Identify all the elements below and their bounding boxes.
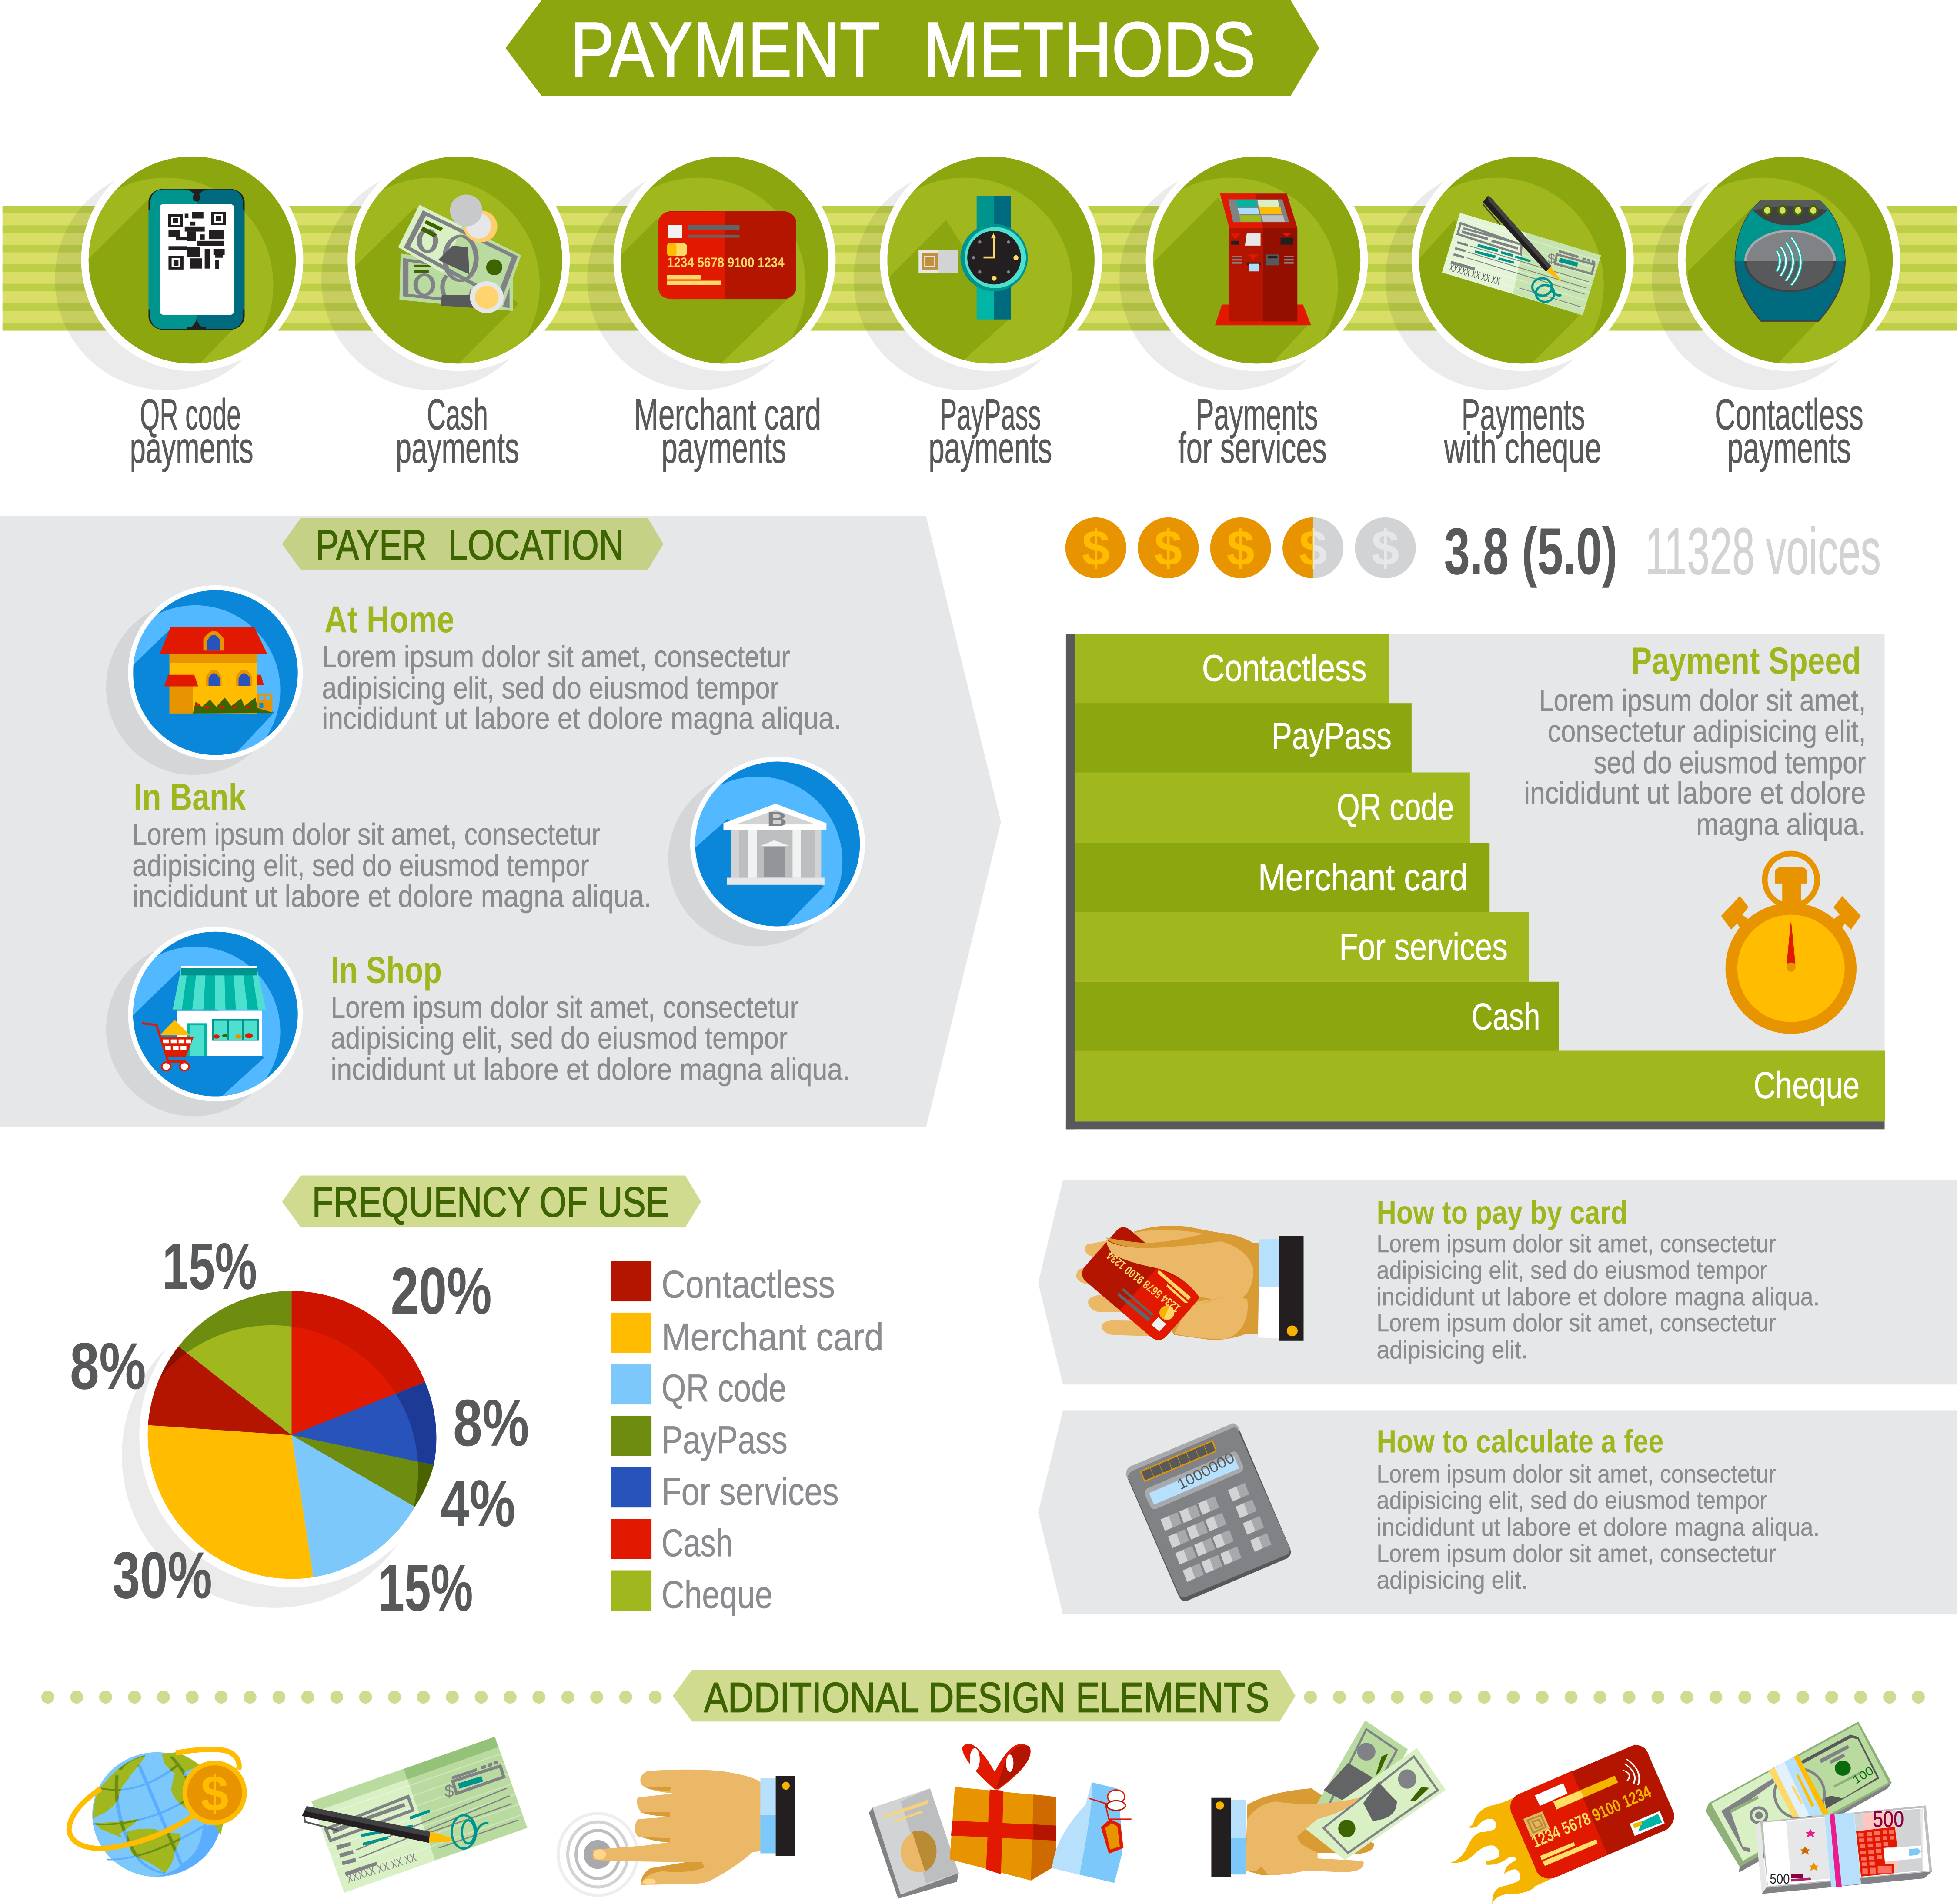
legend: For services [661,1470,839,1513]
stair bar chart [1075,634,1885,1121]
text block: in shop: incididunt ut labore et dolore magna aliqua. [331,1052,850,1086]
icon: stopwatch [1721,854,1861,1034]
panel: payer location [0,516,1001,1127]
text block: at home: At Home [324,599,454,640]
label: payments for services: Payments [1196,390,1318,439]
label: PayPass payments: PayPass [940,390,1041,439]
text block: in bank [132,777,651,914]
rating value: 3.8 (5.0) [1444,514,1617,588]
icon: payment kiosk [1215,193,1311,325]
icon: banknote bundles [1705,1721,1932,1894]
icon: globe with coin: $ [201,1766,229,1821]
percent labels: 15% [162,1230,257,1304]
text block: how to pay by card: adipisicing elit. [1376,1336,1528,1364]
dotted divider right [1304,1691,1925,1704]
label: PayPass payments [928,390,1052,473]
label: payments with cheque: with cheque [1444,424,1601,473]
label: merchant card payments: Merchant card [634,390,821,439]
icon: smart watch [960,196,1028,320]
percent labels [70,1230,529,1625]
payment method: services [1119,149,1368,473]
stair bar chart: Contactless [1202,647,1367,689]
striped ribbon behind payment circles [3,206,1957,331]
icon: cheque with pen: XXXXX XX XX XX [345,1851,418,1885]
percent labels: 8% [70,1329,146,1403]
percent labels: 8% [453,1386,529,1460]
icon: phone with QR code [149,189,244,330]
text block: payment speed: Payment Speed [1631,640,1861,682]
icon: globe with coin [69,1749,247,1877]
icon: banknotes and coins [398,194,521,313]
icon: banknote bundles: 100 [1850,1764,1876,1787]
icon: flaming credit card: 1234 5678 9100 1234 [1529,1782,1654,1852]
legend: QR code [661,1366,786,1410]
panel: payment speed [1066,634,1885,1129]
stair bar chart: QR code [1337,787,1454,828]
text block: in bank: In Bank [134,777,246,818]
icon: SIM chip [918,250,958,273]
label: cash payments [396,390,519,473]
label: payments for services [1178,390,1327,473]
stair bar chart: Cash [1472,996,1540,1038]
payment method: QR code [55,149,303,473]
text block: how to pay by card [1376,1194,1820,1364]
stair bar chart: Merchant card [1258,857,1468,899]
label: contactless payments: payments [1727,424,1851,473]
icon: red credit card: 1234 5678 9100 1234 [667,254,785,270]
text block: how to calculate a fee [1376,1423,1820,1594]
rating: five coins: $ [1082,520,1110,576]
text block: at home: Lorem ipsum dolor sit amet, consectetur [322,640,790,674]
title banner: PAYMENT [571,6,880,93]
icon: hand holding banknotes [1211,1721,1446,1877]
label: merchant card payments [634,390,821,473]
label: cash payments: Cash [427,390,488,439]
label: QR code payments: payments [130,424,254,473]
text block: how to calculate a fee: adipisicing elit. [1376,1566,1528,1594]
pie chart: frequency of use [70,1230,529,1625]
percent labels: 20% [391,1254,492,1328]
payment method: contactless [1652,149,1900,473]
heading: payer location [282,518,663,570]
text block: in shop: In Shop [331,949,442,991]
text block: how to pay by card: Lorem ipsum dolor sit amet, consectetur [1376,1230,1776,1258]
text block: how to pay by card: How to pay by card [1376,1194,1627,1230]
title banner: METHODS [924,6,1256,93]
rating: five coins: $ [1227,520,1255,576]
label: merchant card payments: payments [661,424,786,473]
payment method: merchant card [587,149,835,473]
text block: in shop: adipisicing elit, sed do eiusmod tempor [331,1021,788,1055]
icon: calculator: 1000000 [1174,1449,1237,1493]
percent labels: 4% [441,1467,515,1541]
dotted divider left [41,1691,662,1704]
label: contactless payments [1715,390,1863,473]
legend [611,1261,884,1616]
text block: payment speed: sed do eiusmod tempor [1594,745,1866,780]
text block: how to calculate a fee: incididunt ut labore et dolore magna aliqua. [1376,1514,1820,1541]
rating: five coins: $ [1154,520,1182,576]
text block: payment speed: magna aliqua. [1696,807,1866,841]
legend: Cash [661,1521,733,1564]
icon: banknote bundles: 500 [1770,1871,1790,1887]
label: payments with cheque [1444,390,1601,473]
text block: in bank: Lorem ipsum dolor sit amet, consectetur [132,817,600,851]
icon: finger pressing button [558,1770,795,1895]
rating: five coins [1065,517,1416,578]
text block: how to calculate a fee: Lorem ipsum dolor sit amet, consectetur [1376,1461,1776,1488]
text block: in shop [331,949,850,1086]
legend: Merchant card [661,1315,884,1358]
circle icon: in bank: B [767,808,787,830]
circle icon: at home [106,585,303,775]
legend: Cheque [661,1573,772,1616]
stair bar chart: For services [1339,926,1508,968]
icon: cheque and pen [1442,196,1601,315]
icon: calculator [1126,1424,1291,1601]
text block: payment speed [1524,640,1866,841]
text block: how to calculate a fee: How to calculate a fee [1376,1423,1664,1460]
label: cash payments: payments [396,424,519,473]
text block: payment speed: consectetur adipisicing elit, [1548,714,1866,748]
payment method: cash [321,149,570,473]
rating: five coins: $ [1372,520,1399,576]
percent labels: 15% [378,1551,473,1625]
icon: contactless terminal [1735,200,1845,321]
text block: payment speed: incididunt ut labore et dolore [1524,776,1866,810]
payment method: cheque [1386,149,1634,473]
text block: at home: adipisicing elit, sed do eiusmod tempor [322,670,779,705]
legend: Contactless [661,1263,835,1306]
icon: hand holding card [1076,1226,1304,1341]
label: QR code payments [130,390,254,473]
payment method: PayPass [854,149,1102,473]
text block: at home [322,599,841,735]
payment method: cheque: XXXXX XX XX XX [1448,262,1501,287]
payment method: cheque: $ [1548,251,1556,267]
panel: how to pay by card [1038,1180,1957,1384]
text block: in shop: Lorem ipsum dolor sit amet, consectetur [331,990,799,1024]
icon: banknote bundles: 500 [1873,1807,1904,1832]
label: QR code payments: QR code [140,390,241,439]
panel: how to calculate a fee [1038,1410,1957,1614]
text block: how to calculate a fee: Lorem ipsum dolor sit amet, consectetur [1376,1540,1776,1567]
text block: in bank: adipisicing elit, sed do eiusmod tempor [132,848,589,883]
legend: PayPass [661,1418,788,1461]
label: payments for services: for services [1178,424,1327,473]
circle icon: in shop [106,927,303,1116]
text block: payment speed: Lorem ipsum dolor sit amet, [1539,683,1866,717]
rating: five coins: $ [1299,520,1327,576]
stair bar chart: PayPass [1272,715,1392,757]
heading: payer location: LOCATION [448,521,624,569]
title banner [505,0,1319,96]
text block: in bank: incididunt ut labore et dolore magna aliqua. [132,879,651,914]
heading: frequency of use: FREQUENCY OF USE [312,1178,669,1226]
text block: at home: incididunt ut labore et dolore magna aliqua. [322,701,841,735]
icon: cheque with pen: $ [444,1781,454,1801]
text block: how to pay by card: Lorem ipsum dolor sit amet, consectetur [1376,1309,1776,1337]
percent labels: 30% [112,1538,212,1612]
text block: how to pay by card: incididunt ut labore et dolore magna aliqua. [1376,1283,1820,1311]
label: contactless payments: Contactless [1715,390,1863,439]
icon: cheque with pen [302,1737,528,1893]
text block: how to pay by card: adipisicing elit, sed do eiusmod tempor [1376,1257,1767,1284]
label: payments with cheque: Payments [1462,390,1585,439]
stair bar chart: Cheque [1753,1065,1860,1107]
heading: additional design elements: ADDITIONAL DESIGN ELEMENTS [704,1674,1269,1721]
text block: how to calculate a fee: adipisicing elit, sed do eiusmod tempor [1376,1487,1767,1514]
icon: red credit card [658,211,796,299]
icon: hand holding card: 1234 5678 9100 1234 [1104,1249,1183,1315]
icon: flaming credit card [1451,1745,1674,1904]
rating: five coins: $ [1299,520,1327,576]
label: PayPass payments: payments [928,424,1052,473]
heading: payer location: PAYER [316,521,427,569]
circle icon: in bank [668,757,865,946]
icon: gift, gift card and bag [869,1744,1132,1899]
